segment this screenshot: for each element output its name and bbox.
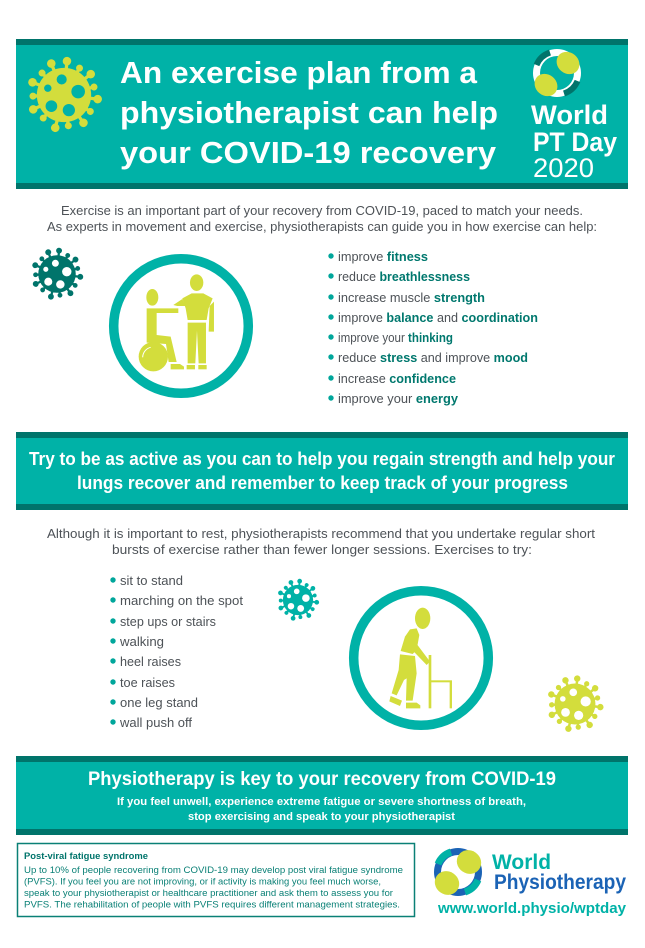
callout: post-viral fatigue syndrome: Post-viral fatigue syndrome: [24, 851, 148, 862]
logo: World Physiotherapy: Physiotherapy: [494, 871, 626, 894]
icon: lime virus: [547, 675, 604, 733]
banner: physiotherapy is key: If you feel unwell, experience extreme fatigue or severe shortness of breath,: [117, 796, 526, 808]
benefits list: [328, 250, 538, 406]
exercises list: marching on the spot: [120, 594, 244, 608]
benefits list: increase confidence: [338, 372, 456, 386]
banner: physiotherapy is key: stop exercising and speak to your physiotherapist: [188, 811, 455, 823]
intro text: Exercise is an important part of your recovery from COVID-19, paced to match your needs.: [61, 204, 583, 218]
callout: post-viral fatigue syndrome: (PVFS). If you feel you are not improving, or if activity is making you feel much worse,: [24, 876, 381, 888]
icon: dark green virus: [31, 247, 84, 300]
exercises list: wall push off: [119, 716, 193, 730]
logo: World PT Day 2020: PT Day: [533, 127, 617, 157]
logo: World Physiotherapy: [430, 845, 626, 900]
benefits list: improve your thinking: [338, 331, 453, 345]
callout: post-viral fatigue syndrome: Up to 10% of people recovering from COVID-19 may develop post viral fatigue syndrome: [24, 865, 403, 876]
title: [120, 55, 498, 170]
banner: physiotherapy is key: Physiotherapy is key to your recovery from COVID-19: [88, 769, 556, 790]
benefits list: reduce breathlessness: [338, 270, 470, 284]
benefits list: improve fitness: [338, 250, 428, 264]
exercises list: one leg stand: [120, 696, 198, 710]
banner: be active: [16, 432, 628, 510]
callout: post-viral fatigue syndrome: [18, 844, 414, 916]
icon: physiotherapist with patient in ring: [114, 259, 248, 393]
logo: World PT Day 2020: 2020: [533, 153, 594, 183]
exercises list: step ups or stairs: [120, 615, 216, 629]
benefits list: improve your energy: [338, 392, 458, 406]
callout: post-viral fatigue syndrome: speak to your physiotherapist or healthcare practitioner and ask them to assess you for: [24, 888, 394, 899]
title: physiotherapist can help: [120, 95, 498, 130]
banner: be active: Try to be as active as you can to help you regain strength and help your: [29, 449, 615, 469]
header banner: [16, 39, 628, 189]
exercises list: sit to stand: [120, 574, 183, 588]
rest paragraph: [47, 527, 596, 557]
intro text: [47, 204, 597, 234]
benefits list: reduce stress and improve mood: [338, 351, 528, 365]
rest paragraph: Although it is important to rest, physiotherapists recommend that you undertake regular short: [47, 527, 596, 541]
icon: person with walking frame in ring: [354, 591, 488, 725]
icon: teal virus: [277, 579, 319, 621]
intro text: As experts in movement and exercise, physiotherapists can guide you in how exercise can help:: [47, 220, 597, 234]
exercises list: [110, 574, 244, 730]
exercises list: toe raises: [120, 676, 175, 690]
logo: World Physiotherapy: World: [492, 851, 551, 874]
banner: physiotherapy is key: [16, 756, 628, 835]
exercises list: heel raises: [120, 655, 181, 669]
title: your COVID-19 recovery: [120, 135, 497, 170]
website url: www.world.physio/wptday: [437, 900, 627, 917]
rest paragraph: bursts of exercise rather than fewer longer sessions. Exercises to try:: [112, 543, 532, 557]
banner: be active: lungs recover and remember to keep track of your progress: [77, 473, 568, 493]
logo: World PT Day 2020: [530, 47, 617, 183]
callout: post-viral fatigue syndrome: PVFS. The rehabilitation of people with PVFS requires different management strategies.: [24, 900, 400, 910]
benefits list: improve balance and coordination: [338, 311, 538, 325]
exercises list: walking: [119, 635, 164, 649]
logo: World PT Day 2020: World: [531, 100, 608, 130]
icon: lime virus in header: [27, 57, 102, 133]
benefits list: increase muscle strength: [338, 291, 485, 305]
title: An exercise plan from a: [120, 55, 478, 90]
